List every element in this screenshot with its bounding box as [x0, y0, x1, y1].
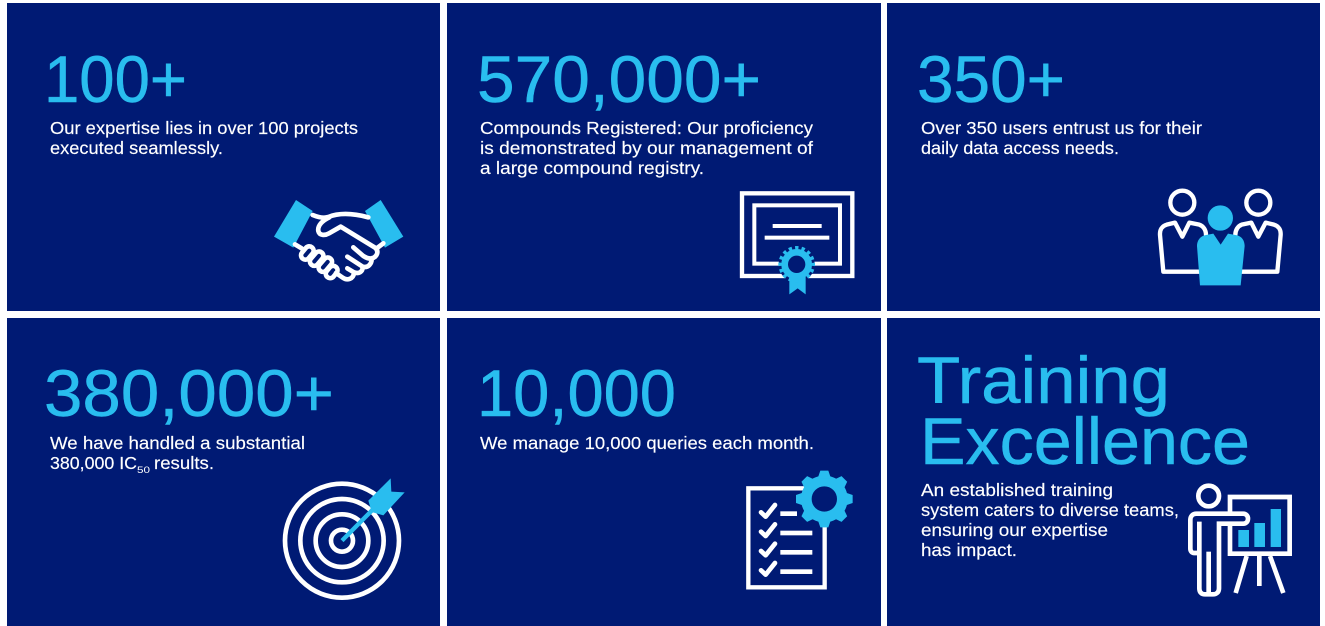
text block: training description: An established training: [921, 480, 1113, 500]
text block: projects description: [50, 118, 358, 158]
text block: users description: daily data access needs.: [921, 138, 1119, 158]
text block: projects description: executed seamlessly.: [50, 138, 223, 158]
heading: 10,000: 10,000: [477, 356, 676, 430]
text block: training description: has impact.: [921, 540, 1017, 560]
icon: team of three people: [1160, 191, 1281, 285]
panel: compounds: [447, 3, 881, 311]
text block: IC50 description: results.: [154, 453, 214, 473]
text block: IC50 description: [50, 433, 305, 476]
text block: IC50 description: We have handled a substantial: [50, 433, 305, 453]
text block: training description: [921, 480, 1179, 560]
text block: users description: [921, 118, 1202, 158]
panel: IC50 results: [7, 318, 440, 626]
panel: training: [887, 318, 1320, 626]
heading: Training Excellence: [917, 343, 1250, 478]
icon: handshake: [274, 200, 403, 280]
icon: certificate: [742, 193, 852, 294]
heading: 380,000+: 380,000+: [44, 356, 334, 430]
heading: Training Excellence: Excellence: [920, 404, 1250, 478]
heading: 570,000+: 570,000+: [477, 42, 761, 116]
text block: compounds description: [480, 118, 813, 178]
text block: compounds description: is demonstrated by our management of: [480, 138, 813, 158]
panel: queries: [447, 318, 881, 626]
icon: presenter with chart: [1190, 486, 1290, 594]
text block: users description: Over 350 users entrust us for their: [921, 118, 1202, 138]
text block: compounds description: Compounds Registered: Our proficiency: [480, 118, 813, 138]
text block: training description: ensuring our expertise: [921, 520, 1108, 540]
panel: projects: [7, 3, 440, 311]
text block: queries description: We manage 10,000 queries each month.: [480, 433, 814, 453]
heading: Training Excellence: Training: [917, 343, 1170, 417]
icon: target with dart: [285, 478, 405, 598]
text block: training description: system caters to diverse teams,: [921, 500, 1179, 520]
text block: IC50 description: 50: [137, 465, 150, 476]
icon: checklist with gear: [748, 471, 853, 587]
text block: compounds description: a large compound registry.: [480, 158, 704, 178]
panel: users: [887, 3, 1320, 311]
heading: 100+: 100+: [44, 42, 187, 116]
heading: 350+: 350+: [917, 42, 1065, 116]
text block: projects description: Our expertise lies in over 100 projects: [50, 118, 358, 138]
text block: IC50 description: 380,000 IC: [50, 453, 137, 473]
